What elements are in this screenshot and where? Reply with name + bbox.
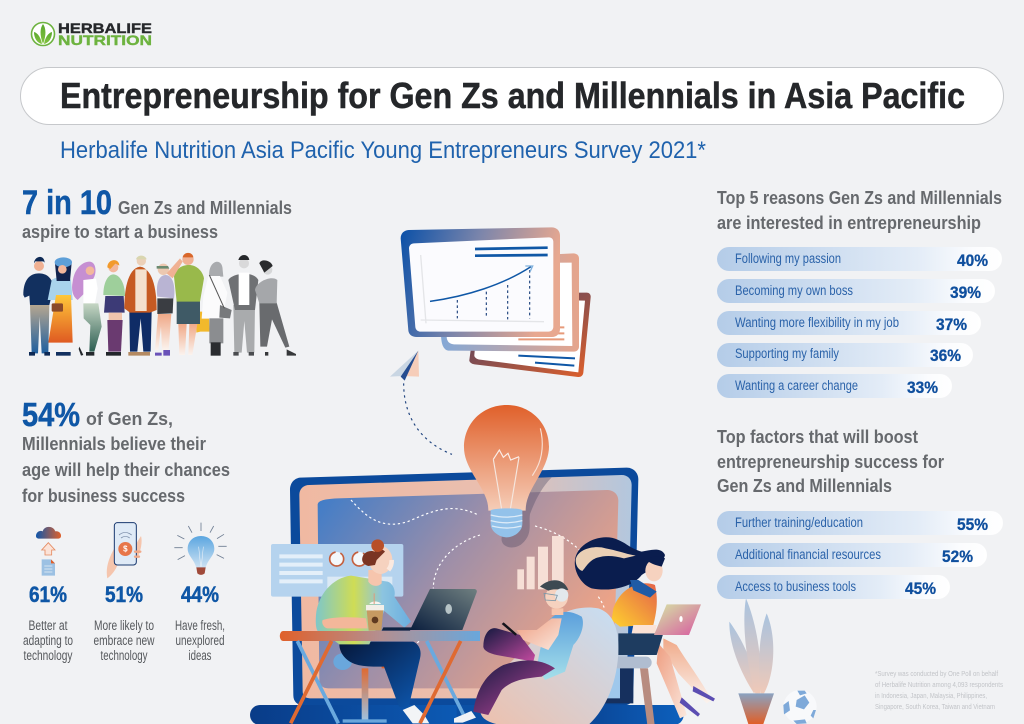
dashed connectors: [351, 500, 604, 646]
icon: phone payment: $: [123, 545, 128, 554]
stat: 51% more likely: embrace new: [94, 633, 155, 648]
woman with laptop: [575, 537, 715, 724]
stat: 61% better at adapting: 61%: [29, 582, 67, 607]
heading: 54%: Millennials believe their: [22, 434, 206, 454]
footnote: in Indonesia, Japan, Malaysia, Philippines,: [875, 693, 987, 700]
bar: further training: Further training/education: [735, 515, 863, 530]
heading: top factors: Top factors that will boost: [717, 427, 918, 447]
desk: [280, 631, 480, 723]
title banner: [20, 68, 1004, 124]
icon: phone payment: [107, 523, 142, 578]
stat: 44% fresh ideas: Have fresh,: [175, 618, 225, 633]
heading: 7 in 10: [22, 184, 292, 242]
bar: further training: [717, 511, 1003, 535]
bar: becoming my own boss: [717, 279, 995, 303]
bar: business tools: 45%: [905, 579, 936, 598]
bar: following my passion: Following my passion: [735, 251, 841, 266]
bar: following my passion: 40%: [957, 251, 988, 270]
footnote: Singapore, South Korea, Taiwan and Vietnam: [875, 704, 995, 711]
heading: 54%: [22, 396, 230, 506]
heading: 54%: 54%: [22, 396, 80, 433]
bar: supporting my family: [717, 343, 973, 367]
laptop monitor backdrop: [250, 468, 684, 724]
heading: 7 in 10: Gen Zs and Millennials: [118, 198, 292, 218]
icon: football: [783, 690, 817, 724]
bar: financial resources: 52%: [942, 547, 973, 566]
floating dashboard: [271, 544, 403, 597]
stat: 44% fresh ideas: ideas: [188, 648, 212, 663]
bean bag with man: [454, 580, 618, 724]
bar: becoming my own boss: 39%: [950, 283, 981, 302]
stat: 44% fresh ideas: unexplored: [176, 633, 224, 648]
bar: supporting my family: 36%: [930, 346, 961, 365]
logo: Herbalife Nutrition: NUTRITION: [58, 32, 152, 48]
heading: 54%: of Gen Zs,: [86, 409, 173, 429]
bar: more flexibility: 37%: [936, 315, 967, 334]
bar: financial resources: Additional financial resources: [735, 547, 881, 562]
illustration: growth chart cards: [401, 227, 591, 377]
bar: business tools: Access to business tools: [735, 579, 856, 594]
stat: 61% better at adapting: technology: [24, 648, 73, 663]
stat: 61% better at adapting: Better at: [28, 618, 68, 633]
logo: Herbalife Nutrition: HERBALIFE: [58, 20, 152, 36]
illustration: group of young people: [23, 253, 296, 356]
stat: 44% fresh ideas: 44%: [181, 582, 219, 607]
stat: 61% better at adapting: adapting to: [23, 633, 73, 648]
bar: career change: Wanting a career change: [735, 378, 858, 393]
heading: 7 in 10: 7 in 10: [22, 184, 112, 222]
stat: 51% more likely: [94, 582, 155, 663]
mini bar chart: [517, 536, 564, 589]
illustration: coworking scene: [250, 405, 715, 724]
heading: 54%: for business success: [22, 486, 185, 506]
heading: top 5 reasons: [717, 188, 1002, 233]
bar: following my passion: [717, 247, 1002, 271]
icon: paper plane with dashed path: [390, 351, 452, 454]
bar: business tools: [717, 575, 950, 599]
icon: light bulb idea: [174, 523, 227, 575]
heading: top factors: Gen Zs and Millennials: [717, 476, 892, 496]
bar: career change: 33%: [907, 378, 938, 397]
bar: becoming my own boss: Becoming my own boss: [735, 283, 853, 298]
icon: cloud upload: [36, 527, 61, 576]
bulb shadow: [502, 477, 552, 547]
logo: Herbalife Nutrition: [32, 20, 152, 48]
stat: 51% more likely: More likely to: [94, 618, 154, 633]
bar: more flexibility: [717, 311, 981, 335]
heading: 54%: age will help their chances: [22, 460, 230, 480]
heading: 7 in 10: aspire to start a business: [22, 222, 218, 242]
stat: 51% more likely: technology: [100, 648, 148, 663]
bar: financial resources: [717, 543, 987, 567]
footnote: [875, 671, 1003, 711]
bar: career change: [717, 374, 952, 398]
man at desk: [316, 539, 477, 723]
subtitle: Herbalife Nutrition Asia Pacific Young Entrepreneurs Survey 2021*: [60, 137, 706, 164]
stat: 61% better at adapting: [23, 582, 73, 663]
footnote: of Herbalife Nutrition among 4,093 respondents: [875, 682, 1003, 689]
footnote: *Survey was conducted by One Poll on behalf: [875, 671, 998, 678]
heading: top factors: entrepreneurship success for: [717, 452, 944, 472]
light bulb: [464, 405, 549, 537]
stat: 51% more likely: 51%: [105, 582, 143, 607]
plant: [729, 598, 774, 724]
stat: 44% fresh ideas: [175, 582, 225, 663]
heading: top factors: [717, 427, 944, 496]
heading: top 5 reasons: are interested in entrepreneurship: [717, 213, 981, 233]
bar: further training: 55%: [957, 515, 988, 534]
bar: more flexibility: Wanting more flexibility in my job: [735, 315, 899, 330]
bar: supporting my family: Supporting my family: [735, 346, 839, 361]
